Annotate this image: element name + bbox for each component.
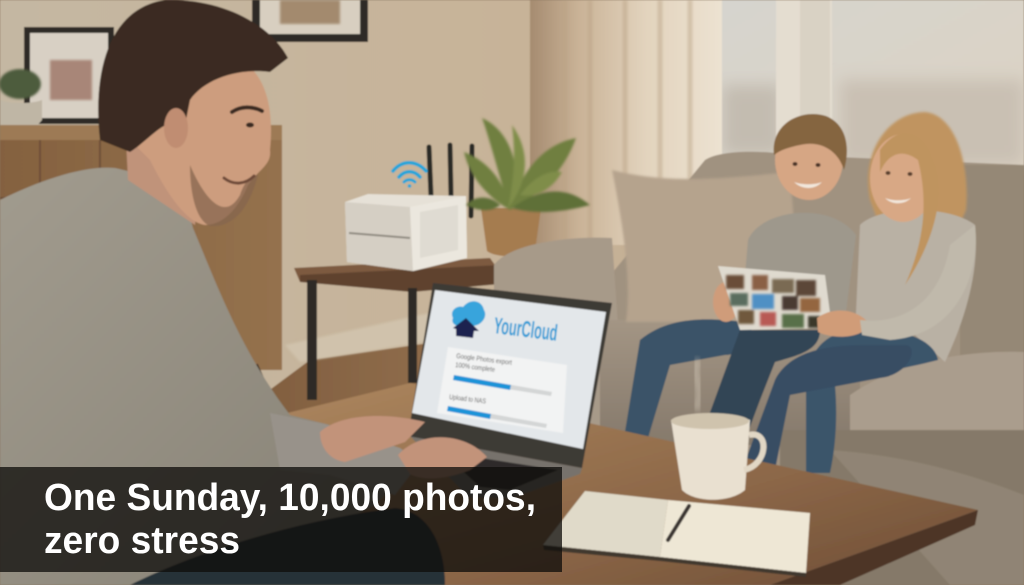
laptop base and keyboard xyxy=(410,436,582,498)
cloud house logo xyxy=(452,301,485,338)
laptop xyxy=(408,283,612,498)
side table xyxy=(294,258,500,400)
YourCloud wordmark: YourCloud xyxy=(492,312,559,346)
upload label: Upload to NAS xyxy=(449,394,487,406)
framed picture: top xyxy=(252,0,368,42)
curtain xyxy=(530,0,722,245)
progress card: 100% complete xyxy=(455,362,495,374)
boy's face xyxy=(792,162,822,188)
sofa cushion xyxy=(612,170,800,322)
forearm xyxy=(270,413,420,495)
floor xyxy=(240,330,640,585)
coffee mug xyxy=(671,413,763,500)
steam xyxy=(695,360,700,410)
girl's face xyxy=(885,171,912,203)
potted plant xyxy=(464,118,590,256)
icon: wifi signal xyxy=(393,163,426,188)
man xyxy=(0,0,445,585)
coffee table xyxy=(275,383,978,585)
sweater xyxy=(0,168,420,585)
man's brow, eye and smile xyxy=(224,107,262,183)
progress card xyxy=(437,347,567,433)
wooden cabinet xyxy=(0,125,282,390)
export label: Google Photos export xyxy=(456,353,512,367)
small shelf plant xyxy=(0,69,42,127)
upload progress bar xyxy=(447,406,547,428)
antennas xyxy=(429,145,472,216)
window xyxy=(720,0,1024,170)
girl's arm xyxy=(860,225,976,340)
girl xyxy=(742,112,976,473)
framed picture: left xyxy=(24,27,114,124)
caption band xyxy=(0,467,562,572)
trousers xyxy=(130,508,445,585)
boy xyxy=(624,114,856,440)
title: One Sunday, 10,000 photos, xyxy=(44,477,536,519)
neck and head xyxy=(98,0,288,226)
NAS router xyxy=(345,145,472,271)
open notebook xyxy=(543,491,810,577)
sofa xyxy=(494,152,1024,585)
man's forearm and hands xyxy=(270,413,487,495)
tablet with photo grid xyxy=(718,266,870,337)
laptop screen xyxy=(412,290,606,449)
baseboard xyxy=(285,300,500,362)
title xyxy=(44,477,536,562)
hands xyxy=(320,416,425,462)
title: zero stress xyxy=(44,520,240,562)
export progress bar xyxy=(453,375,552,396)
laptop lid xyxy=(408,283,612,468)
